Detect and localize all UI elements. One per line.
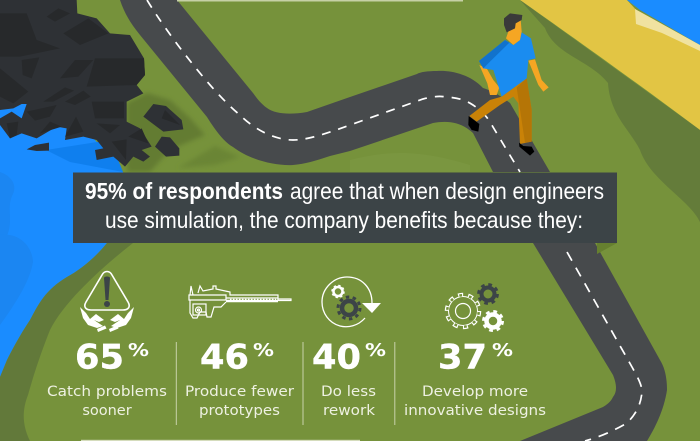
stat: 40%: % [365, 340, 386, 361]
stat: 40% [312, 338, 386, 419]
banner [73, 172, 617, 254]
road [120, 0, 667, 441]
person walking [468, 13, 549, 156]
stat: 65%: Catch problems [47, 384, 167, 400]
stat: 37%: innovative designs [404, 403, 546, 419]
stat: 65%: % [128, 340, 149, 361]
bottom edge line [81, 440, 360, 441]
dark gear [478, 284, 498, 304]
dividers [176, 342, 395, 425]
stat: 40%: rework [323, 403, 376, 419]
stat: 37%: 37 [438, 338, 487, 378]
icon: warning with hands [80, 272, 134, 332]
dark green shoreline [0, 243, 133, 441]
rocks [0, 0, 183, 167]
white gear [484, 312, 502, 330]
stat: 37%: Develop more [422, 384, 528, 400]
stat: 40%: Do less [321, 384, 376, 400]
stat: 46%: 46 [200, 338, 249, 378]
beach and sea: top right [520, 0, 700, 130]
stat: 46%: % [253, 340, 274, 361]
icon: caliper [189, 286, 291, 318]
small white gear [332, 286, 344, 298]
banner text [85, 178, 604, 233]
stat: 46% [185, 338, 294, 419]
banner text: agree that when design engineers [290, 178, 604, 204]
banner text: 95% of respondents [85, 178, 283, 204]
stat: 65%: sooner [82, 403, 132, 419]
stat: 37% [404, 338, 546, 419]
stat: 37%: % [492, 340, 513, 361]
icon: gears [446, 284, 502, 330]
stat: 65%: 65 [75, 338, 124, 378]
dark gear [338, 297, 360, 319]
grass shading near rocks [127, 93, 205, 172]
banner text: use simulation, the company benefits because they: [105, 207, 583, 233]
dark green slope under beach [520, 0, 700, 222]
water: left [0, 100, 133, 377]
stat: 46%: Produce fewer [185, 384, 294, 400]
top edge line [177, 0, 463, 2]
stat: 46%: prototypes [199, 403, 280, 419]
outline gear [446, 294, 480, 328]
icon: rework cycle [322, 277, 381, 327]
stat: 40%: 40 [312, 338, 361, 378]
stat: 65% [47, 338, 167, 419]
